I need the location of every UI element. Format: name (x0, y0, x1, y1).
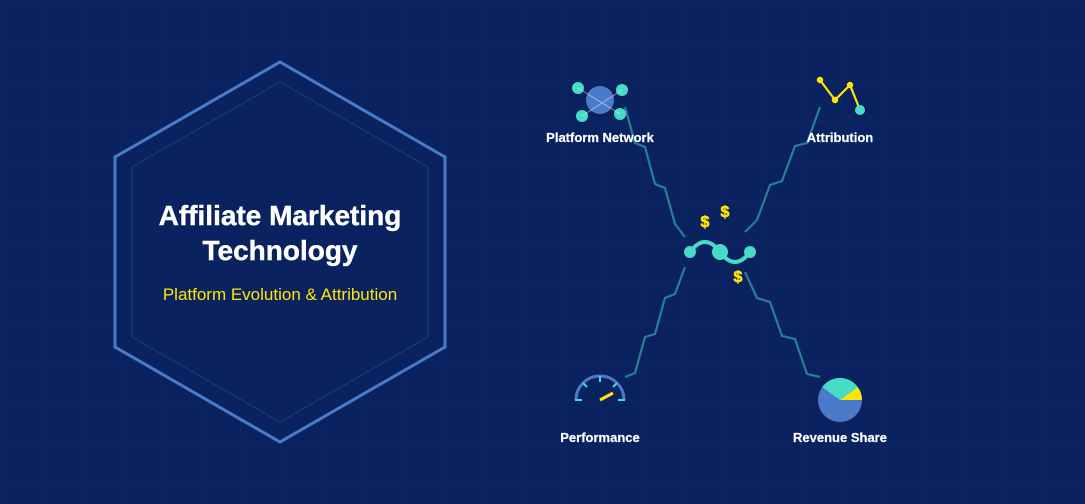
title line 2: Technology (202, 235, 358, 266)
label: revenue share: Revenue Share (793, 430, 887, 445)
connector: top right (745, 107, 820, 232)
label: platform network: Platform Network (546, 130, 655, 145)
icon: performance gauge (575, 376, 625, 400)
connector: bottom right (745, 272, 820, 377)
panel: hexagon title (115, 62, 445, 442)
icon: dollar sign bottom: $ (734, 269, 743, 286)
icon: attribution path (817, 77, 865, 115)
icon: platform network (572, 82, 628, 122)
connector: bottom left (625, 267, 685, 377)
icon: revenue share pie (818, 378, 862, 422)
label: performance: Performance (560, 430, 640, 445)
icon: central link (684, 242, 756, 262)
title: Affiliate Marketing (159, 200, 401, 231)
icon: dollar sign left: $ (701, 214, 710, 231)
subtitle: Platform Evolution & Attribution (163, 285, 397, 304)
connector: top left (625, 107, 685, 237)
icon: dollar sign top: $ (721, 204, 730, 221)
label: attribution: Attribution (807, 130, 873, 145)
